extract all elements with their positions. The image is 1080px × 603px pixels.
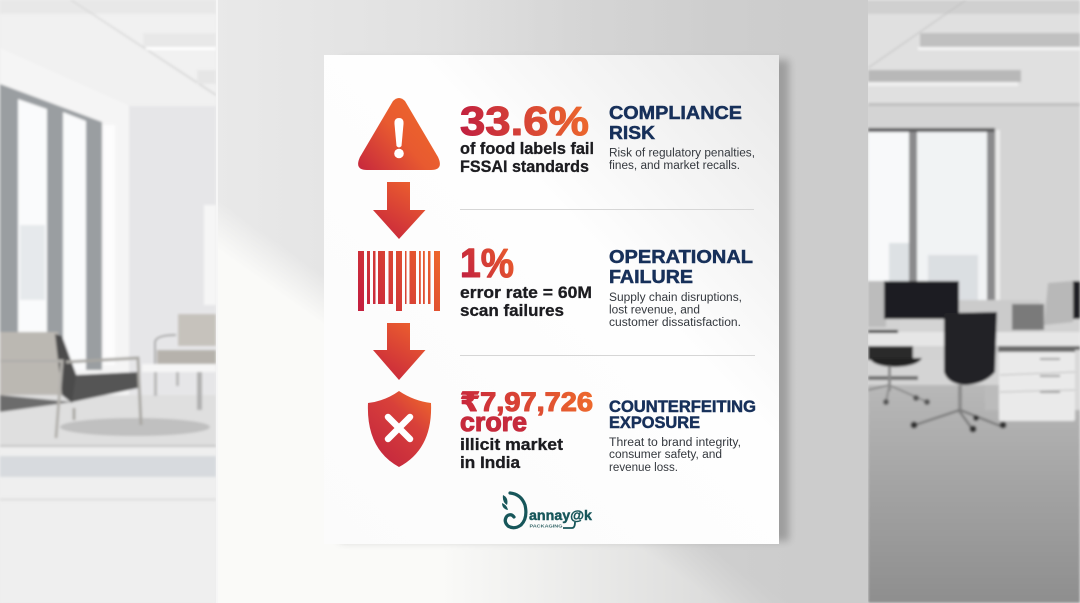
stat caption: in India [460, 454, 521, 472]
stat caption: FSSAI standards [460, 158, 589, 176]
stat: 33.6%: 33.6% [460, 98, 589, 144]
description: revenue loss. [609, 462, 678, 474]
section: operational failure [609, 246, 753, 329]
description: customer dissatisfaction. [609, 317, 741, 329]
stat caption: error rate = 60M [460, 284, 592, 302]
heading: counterfeiting exposure: COUNTERFEITING [609, 398, 756, 416]
logo: Dannayak Packaging: PACKAGING [530, 524, 563, 530]
heading: counterfeiting exposure: EXPOSURE [609, 414, 700, 432]
flow column: icons and arrows [358, 98, 440, 467]
heading: operational failure: OPERATIONAL [609, 246, 753, 267]
description: fines, and market recalls. [609, 160, 740, 172]
stat caption [460, 436, 564, 472]
background: left office room [0, 0, 216, 603]
stat caption: illicit market [460, 436, 564, 454]
heading: compliance risk: COMPLIANCE [609, 102, 742, 123]
icon: barcode [358, 251, 440, 311]
description [609, 437, 741, 474]
stat: rupee amount: ₹7,97,726 [460, 387, 593, 417]
description [609, 292, 742, 329]
stat caption: of food labels fail [460, 140, 594, 158]
description: Threat to brand integrity, [609, 437, 741, 449]
description: lost revenue, and [609, 304, 700, 316]
stat caption: scan failures [460, 302, 564, 320]
heading: operational failure [609, 246, 753, 287]
stat caption [460, 140, 594, 176]
section: counterfeiting exposure [609, 398, 756, 474]
section: compliance stat [460, 98, 594, 176]
heading: operational failure: FAILURE [609, 266, 693, 287]
heading: compliance risk [609, 102, 742, 143]
arrow: down to shield [373, 323, 426, 380]
background: white wall [216, 0, 868, 603]
section: counterfeiting stat [460, 387, 593, 472]
logo: Dannayak Packaging [502, 493, 593, 530]
stat caption [460, 284, 592, 320]
icon: shield with cross [368, 391, 431, 467]
description [609, 148, 755, 172]
icon: warning triangle [358, 98, 440, 170]
heading: counterfeiting exposure [609, 398, 756, 432]
section: operational stat [460, 240, 592, 320]
poster shadow [340, 60, 789, 541]
description: Risk of regulatory penalties, [609, 148, 755, 160]
section: compliance risk [609, 102, 755, 172]
stat: rupee amount: crore [460, 407, 527, 437]
description: Supply chain disruptions, [609, 292, 742, 304]
stat: 1%: 1% [460, 240, 514, 286]
stat: rupee amount [460, 387, 593, 437]
logo: Dannayak Packaging: annay@k [529, 508, 593, 523]
background: right office room [866, 0, 1080, 603]
arrow: down to barcode [373, 182, 426, 239]
poster panel [324, 55, 779, 544]
description: consumer safety, and [609, 449, 722, 461]
heading: compliance risk: RISK [609, 122, 656, 143]
